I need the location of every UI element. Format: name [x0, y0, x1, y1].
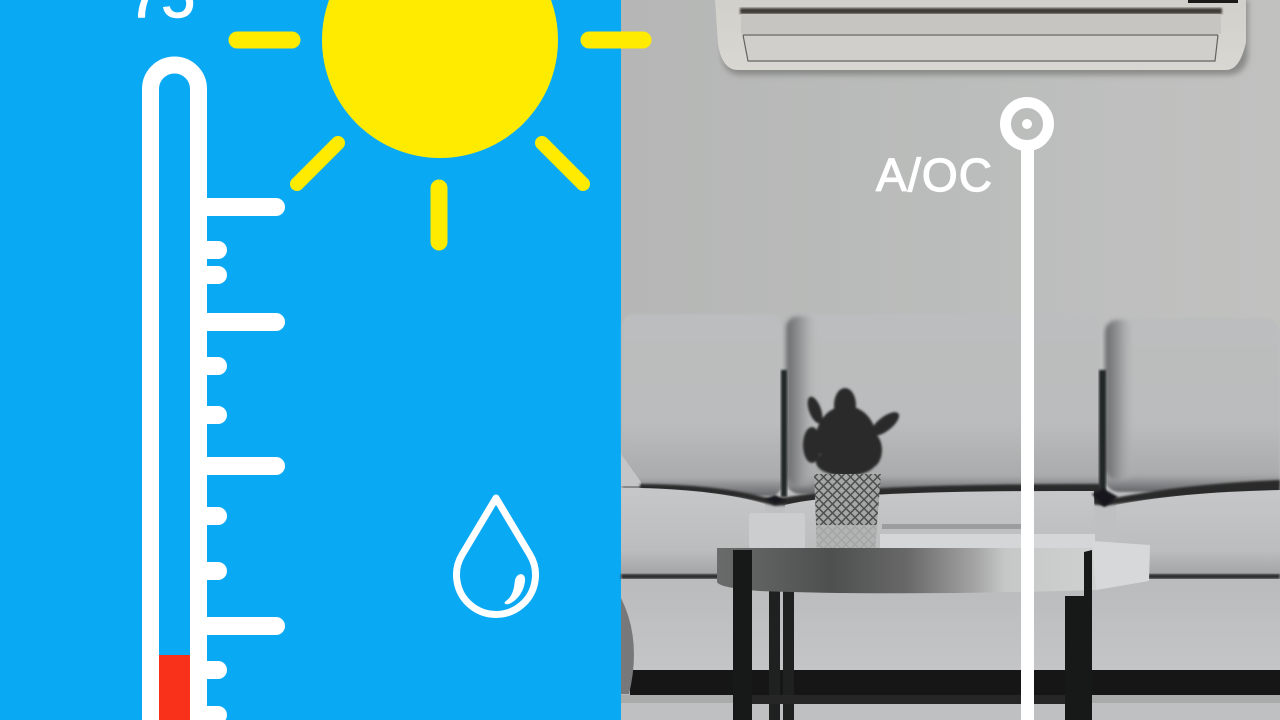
cushion gap left [781, 370, 787, 497]
vase [814, 474, 881, 549]
vase lower highlight [816, 525, 878, 549]
sun disc [322, 0, 558, 158]
grey ball at left edge [621, 598, 634, 694]
display panel [1188, 0, 1238, 3]
air conditioner unit [715, 0, 1248, 75]
wall [621, 0, 1280, 720]
coffee table items [749, 388, 1095, 550]
flap outline [743, 35, 1218, 61]
far leg two [783, 590, 794, 720]
thermometer red level [158, 655, 190, 720]
rug [621, 703, 1280, 720]
front leg right [1065, 550, 1092, 720]
pin ring [1006, 102, 1048, 146]
seat dark crease [640, 480, 1280, 506]
unit shadow [722, 0, 1248, 75]
far leg one [769, 590, 780, 720]
seat centre [785, 491, 1096, 576]
sun rays [237, 40, 643, 242]
lower shelf [750, 695, 1070, 704]
thermometer scale ticks [200, 207, 276, 715]
location pin marker [1006, 102, 1048, 720]
air slot [740, 8, 1222, 14]
drop outline [457, 498, 536, 614]
cushion left [622, 314, 782, 496]
coffee table [717, 541, 1150, 720]
sofa front [621, 579, 1280, 670]
thermometer tube [150, 65, 198, 720]
pin centre dot [1022, 119, 1032, 129]
icon: water drop [457, 498, 536, 614]
panel: blue outdoor background [0, 0, 621, 720]
panel: living room photo [621, 0, 1280, 720]
table top [717, 548, 1096, 593]
cushion right left shade [1105, 320, 1135, 480]
louvre [741, 14, 1221, 34]
pin stem [1021, 140, 1034, 720]
cushion centre [786, 314, 1100, 494]
icon: sun [237, 0, 643, 242]
drop highlight [505, 574, 525, 604]
unit body [715, 0, 1246, 70]
floor shadow band [630, 670, 1280, 695]
seat junction marks [765, 489, 1118, 507]
floor strip [621, 695, 1280, 704]
A/OC label: A/OC [876, 149, 992, 201]
seat right [1116, 490, 1280, 576]
seat left [621, 488, 765, 576]
sofa [621, 314, 1280, 720]
front leg left [733, 550, 752, 720]
cushion right [1105, 318, 1280, 492]
cushion gap right [1099, 370, 1106, 495]
small pillow [621, 454, 641, 486]
sofa seam [621, 574, 1280, 579]
cushion centre left shade [786, 316, 818, 486]
seat base fill [621, 490, 1280, 580]
book stack [880, 534, 1095, 550]
book edge [882, 524, 1022, 529]
plant leaves [803, 388, 903, 476]
lower flap [743, 35, 1218, 61]
icon: thermometer [150, 65, 276, 720]
table corner block [1092, 541, 1150, 590]
candle box [749, 513, 805, 549]
